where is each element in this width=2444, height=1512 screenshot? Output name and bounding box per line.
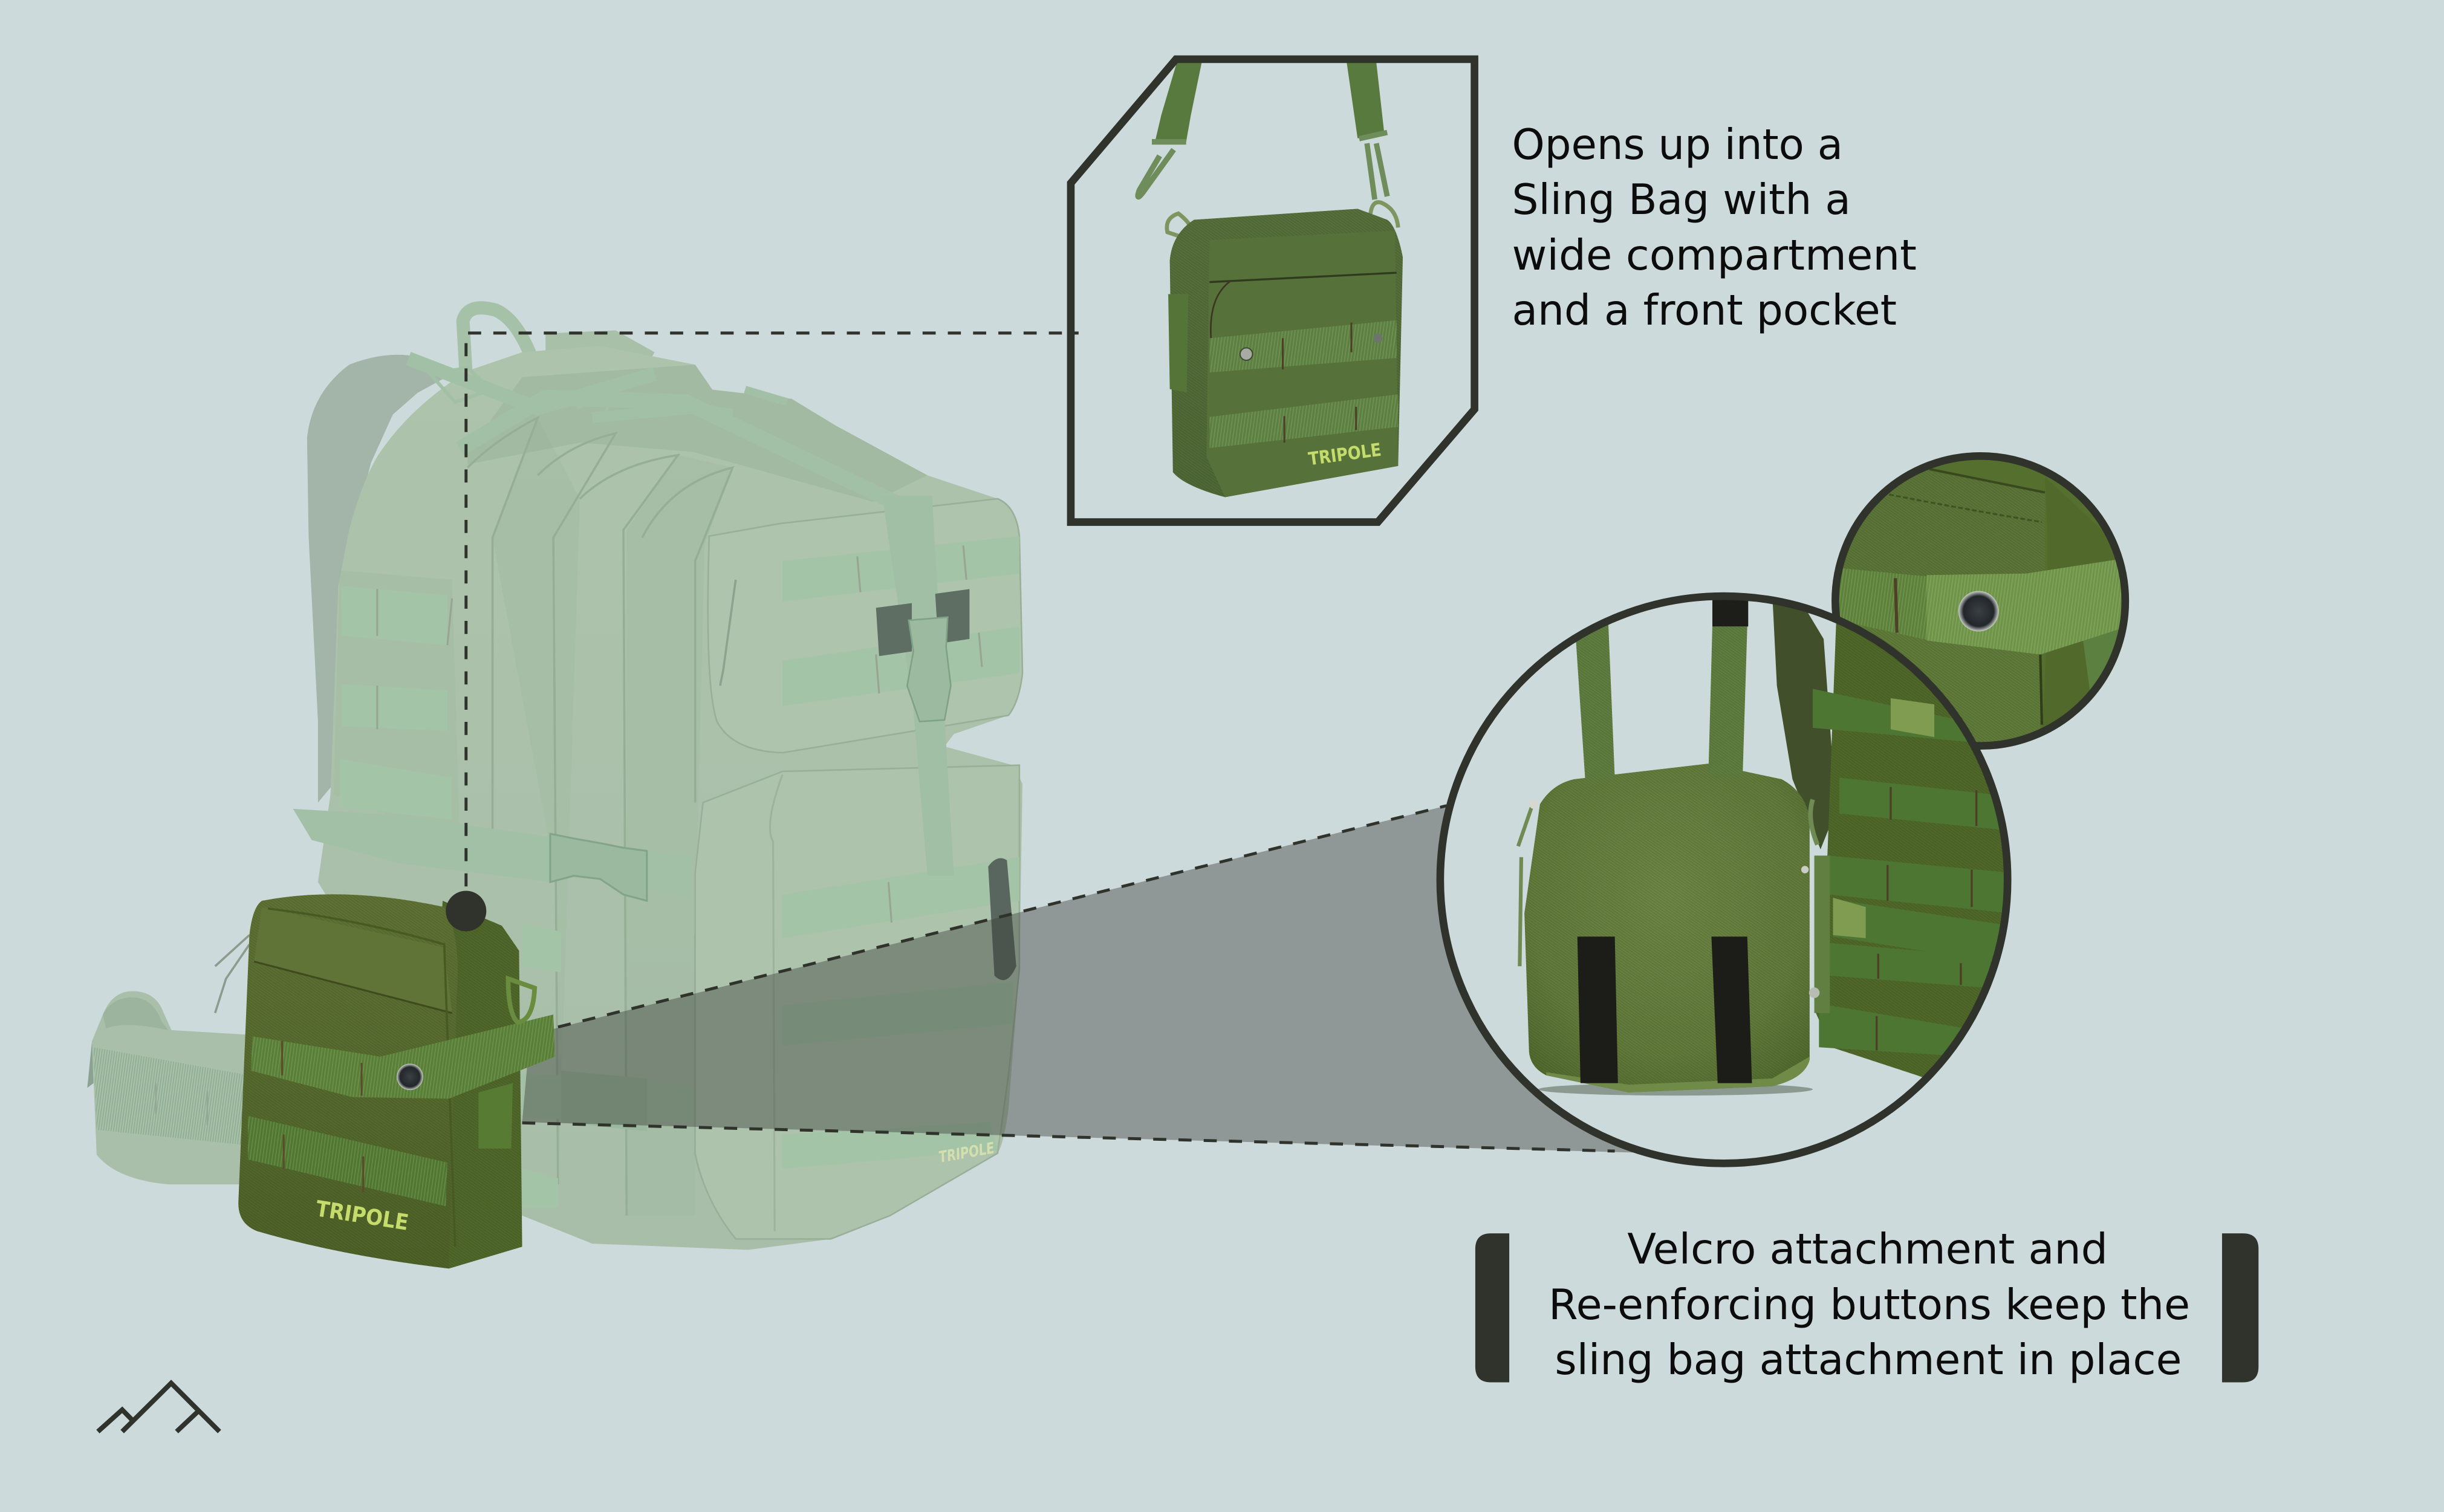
drawstring: [215, 935, 249, 1013]
d-ring: [508, 979, 535, 1022]
faded chest strap: [293, 809, 692, 898]
faded top handle: [463, 308, 533, 374]
right side fabric: [2042, 477, 2136, 733]
left clip: [1138, 142, 1186, 196]
top description text: Opens up into a: [1512, 120, 1843, 169]
bag back: [1524, 764, 1810, 1092]
logo text: TRIPOLE: [1307, 439, 1382, 469]
upper webbing strap: [251, 1014, 555, 1098]
callout lines: Re-enforcing buttons keep the: [1549, 1280, 2190, 1329]
bag shadow: [1538, 1083, 1813, 1095]
strap velcro tip: [1712, 592, 1748, 626]
shaded projection cone: [522, 801, 1715, 1155]
webbing one: [1209, 320, 1397, 372]
snaps: [1240, 348, 1253, 360]
front pocket: [1206, 231, 1398, 497]
faded padded shoulder strap: [307, 355, 452, 803]
faded lower buckle: [561, 1071, 647, 1131]
close-up circle: button detail: [1824, 452, 2136, 748]
callout lines: [1549, 1225, 2190, 1384]
stitching: [282, 1041, 363, 1192]
faded upper pocket: [708, 499, 1022, 753]
upper fabric: [1843, 471, 2045, 576]
faded backpack: [87, 308, 1022, 1250]
callout lines: sling bag attachment in place: [1555, 1335, 2182, 1384]
side band: [2083, 629, 2119, 690]
right shoulder strap: [1347, 62, 1384, 138]
callout lines: Velcro attachment and: [1627, 1225, 2108, 1274]
faded velcro patches: [876, 589, 969, 656]
webbing two: [1209, 394, 1398, 448]
faded chest buckle: [550, 834, 647, 901]
faded logo: TRIPOLE: [937, 1139, 996, 1167]
webbing left: [1831, 567, 1929, 640]
top description text: wide compartment: [1512, 231, 1917, 280]
callout text with side bars: [1475, 1225, 2258, 1384]
bag piping: [268, 909, 455, 1247]
right bar: [2222, 1233, 2258, 1383]
icon: mountain logo: [98, 1383, 219, 1432]
logo text: TRIPOLE: [314, 1196, 411, 1236]
stitches: [1896, 578, 1897, 633]
lower fabric: [1856, 624, 2040, 742]
faded carabiner: [988, 858, 1016, 980]
close-up circle: velcro attachment: [1440, 592, 2026, 1163]
snap button: [1958, 591, 1999, 632]
faded hip belt: [87, 991, 249, 1184]
velcro tabs: [1833, 698, 1934, 938]
faded lower strap: [522, 1074, 692, 1122]
side panel: [430, 901, 522, 1268]
sling bag panel: [1071, 59, 1475, 522]
bag base edge: [1546, 1057, 1810, 1092]
connector dot: [446, 891, 486, 932]
faded vertical strap: [882, 496, 954, 876]
rings: [1167, 202, 1398, 240]
webbing stitches: [1877, 787, 1977, 1050]
left velcro strap: [1573, 592, 1615, 779]
lower webbing strap: [248, 1116, 447, 1206]
faded lid: [467, 365, 928, 502]
side zip pulls: [1518, 801, 1534, 966]
top description text: Sling Bag with a: [1512, 175, 1851, 224]
faded top strap system: [408, 359, 920, 514]
zipper: [1209, 273, 1397, 282]
side tab: [1168, 294, 1188, 392]
sling bag body: [1170, 209, 1403, 497]
faded pocket zip: [720, 580, 736, 686]
left shoulder strap: [1155, 62, 1201, 142]
top description text: and a front pocket: [1512, 286, 1897, 335]
faded webbing bands: [340, 536, 1019, 1208]
side tab: [478, 1083, 513, 1149]
right velcro strap: [1708, 626, 1747, 777]
backpack mesh side: [1772, 592, 1836, 849]
top description text: [1512, 120, 1917, 335]
webbing right: [1926, 558, 2128, 655]
sling bag hexagonal frame: [1071, 59, 1475, 522]
faded panel shading: [334, 418, 733, 1216]
side hardware: [1810, 799, 1818, 845]
faded body: [318, 346, 1022, 1250]
dashed connector to sling bag: [466, 333, 1079, 912]
backpack webbing: [1813, 689, 2010, 1057]
right clip: [1359, 132, 1387, 200]
faded top grab strap: [545, 331, 655, 374]
right velcro patch: [1711, 936, 1752, 1083]
top flap: [254, 907, 452, 1013]
front panel: [238, 894, 458, 1268]
ring outline: [1835, 456, 2125, 746]
backpack side panel: [1816, 623, 2026, 1114]
faded buckle: [907, 617, 951, 722]
side strap: [1815, 855, 1830, 1013]
ring outline: [1440, 596, 2007, 1163]
attached small bag on backpack: [215, 894, 555, 1268]
stitching: [1283, 323, 1356, 443]
left velcro patch: [1578, 936, 1618, 1083]
faded central panels: [467, 418, 736, 1231]
faded webbing stitches: [377, 545, 982, 923]
left bar: [1475, 1233, 1509, 1383]
snap button: [397, 1063, 423, 1090]
faded lower pocket: [695, 765, 1019, 1239]
